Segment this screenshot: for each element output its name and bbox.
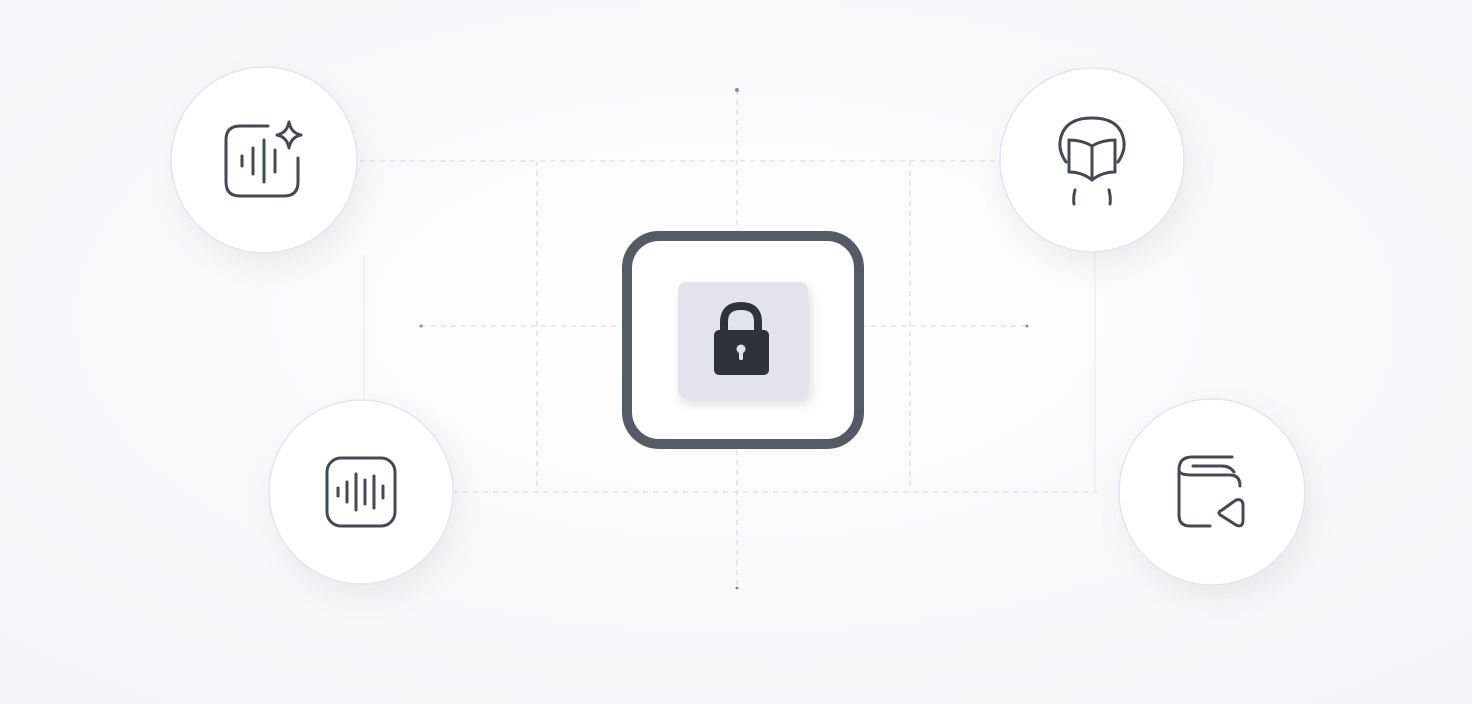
connector grid [360,90,1097,588]
icon: book with speaker [1119,399,1305,585]
icon: padlock [714,306,769,375]
icon: audiobook headphones [1000,68,1184,252]
lock tile [678,282,808,398]
icon: AI voice sparkle [171,67,357,253]
icon: voice waveform [269,400,453,584]
center lock panel [627,236,859,444]
